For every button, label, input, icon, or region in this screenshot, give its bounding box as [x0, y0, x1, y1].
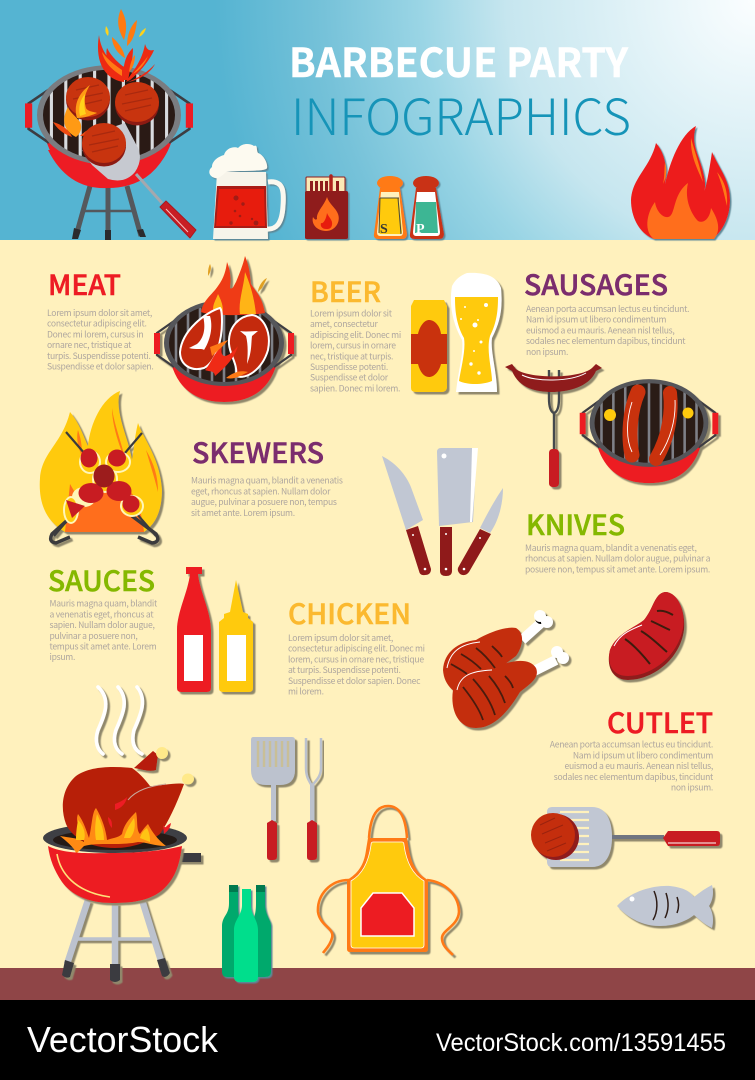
icon: flame with skewers [40, 391, 162, 543]
text: cutlet description: euismod a eu mauris. Aenean nisl tellus, [564, 760, 713, 772]
icon: sausage on fork [505, 364, 602, 487]
text: beer description: Suspendisse et dolor [310, 372, 389, 384]
heading: cutlet: CUTLET [607, 702, 713, 742]
title: INFOGRAPHICS [291, 78, 631, 150]
footer: VectorStock logo: VectorStock [27, 1019, 219, 1060]
text: sauces description: pulvinar a posuere non, [50, 630, 138, 642]
text: cutlet description [550, 739, 714, 794]
heading: sausages: SAUSAGES [524, 264, 668, 304]
icon: kettle grill with roast chicken [43, 745, 201, 982]
icon: salt and pepper shakers [374, 176, 444, 239]
icon: big grill with burgers [25, 9, 196, 240]
panel: skewers [40, 391, 343, 543]
icon: grill with sausages [580, 379, 718, 483]
icon: ketchup bottle [177, 567, 211, 692]
icon: matchbox [305, 176, 348, 239]
text: skewers description: eget, rhoncus at sapien. Nullam dolor [191, 485, 331, 497]
text: cutlet description: Nam id ipsum ut libero condimentum [573, 749, 713, 761]
heading: knives: KNIVES [526, 504, 625, 544]
heading: meat: MEAT [48, 264, 121, 304]
cream background [0, 240, 755, 968]
icon: green bottles [222, 885, 271, 982]
text: sauces description: Mauris magna quam, blandit [50, 598, 158, 610]
text: sauces description: ipsum. [50, 651, 75, 663]
icon: cleaver [437, 448, 478, 576]
title: BARBECUE PARTY [289, 31, 629, 89]
text: chicken description: at turpis. Suspendisse potenti. [288, 664, 401, 676]
text: skewers description [191, 475, 343, 519]
panel: meat [47, 256, 294, 402]
heading: chicken: CHICKEN [288, 593, 411, 633]
panel: chicken [288, 592, 684, 728]
flames over the burger [53, 85, 101, 137]
icon: salt and pepper shakers: S [380, 222, 388, 237]
text: skewers description: Mauris magna quam, blandit a venenatis [191, 475, 343, 487]
text: beer description: sapien. Donec mi lorem. [310, 382, 400, 394]
text: beer description: adipiscing elit. Donec mi [310, 329, 401, 341]
text: chicken description: lorem, cursus in ornare nec, tristique [288, 653, 424, 665]
icon: mustard bottle [219, 580, 253, 692]
footer: image id: VectorStock.com/13591455 [436, 1029, 726, 1057]
text: cutlet description: non ipsum. [671, 782, 713, 794]
panel: knives [382, 448, 711, 576]
flames above the grill [98, 9, 155, 82]
text: chicken description: mi lorem. [288, 686, 324, 698]
text: beer description [310, 308, 401, 394]
text: sauces description: tempus sit amet ante. Lorem [50, 640, 157, 652]
text: sausages description: Nam id ipsum ut libero condimentum [526, 314, 666, 326]
text: sauces description [50, 598, 158, 663]
text: knives description: rhoncus at sapien. Nullam dolor augue, pulvinar a [525, 553, 711, 565]
heading: beer: BEER [310, 271, 381, 311]
text: beer description: Suspendisse potenti. [310, 361, 388, 373]
panel: beer [310, 271, 502, 394]
icon: steam [96, 687, 142, 754]
icon: paring knife [458, 488, 503, 575]
text: knives description: posuere non, tempus sit amet ante. Lorem ipsum. [525, 563, 710, 575]
text: meat description: turpis. Suspendisse potenti. [47, 350, 151, 362]
text: beer description: amet, consectetur [310, 318, 379, 330]
panel: sausages [505, 264, 718, 487]
icon: beer mug [209, 144, 283, 239]
text: sausages description: non ipsum. [526, 346, 568, 358]
text: cutlet description: Aenean porta accumsan lectus eu tincidunt. [550, 739, 713, 751]
text: beer description: nec, tristique at turpis. [310, 350, 393, 362]
text: sauces description: sapien. Nullam dolor augue, [50, 619, 155, 631]
icon: fish [617, 885, 713, 928]
icon: steak [609, 592, 684, 680]
text: meat description: Lorem ipsum dolor sit amet, [47, 307, 152, 319]
text: sausages description: Aenean porta accumsan lectus eu tincidunt. [526, 303, 689, 315]
text: skewers description: augue, pulvinar a posuere non, tempus [191, 496, 337, 508]
panel: sauces [48, 560, 253, 692]
text: sausages description: euismod a eu mauris. Aenean nisl tellus, [526, 324, 675, 336]
text: knives description: Mauris magna quam, blandit a venenatis eget, [525, 542, 697, 554]
text: meat description: Suspendisse et dolor sapien. [47, 360, 154, 372]
text: sausages description [526, 303, 689, 358]
icon: spatula with patty [531, 807, 720, 867]
text: chicken description: Lorem ipsum dolor sit amet, [288, 632, 393, 644]
text: chicken description: consectetur adipiscing elit. Donec mi [288, 643, 425, 655]
icon: apron [318, 806, 459, 955]
title [289, 31, 631, 150]
icon: chicken legs [443, 610, 569, 728]
panel: cutlet [531, 702, 720, 928]
text: knives description [525, 542, 711, 575]
brown floor band [0, 968, 755, 1000]
icon: beer can [411, 300, 447, 392]
text: meat description [47, 307, 154, 372]
heading: skewers: SKEWERS [192, 432, 324, 472]
text: chicken description [288, 632, 425, 698]
icon: salt and pepper shakers: P [416, 222, 425, 237]
icon: beer glass [451, 273, 502, 392]
icon: big flame [631, 126, 730, 239]
black footer band [0, 1000, 755, 1080]
heading: sauces: SAUCES [48, 560, 155, 600]
icon: serving fork [306, 738, 321, 860]
text: sausages description: sodales nec elementum dapibus, tincidunt [526, 335, 686, 347]
header background [0, 0, 755, 240]
text: beer description: Lorem ipsum dolor sit [310, 308, 393, 320]
icon: chef knife [382, 456, 431, 575]
text: meat description: Donec mi lorem, cursus in [47, 328, 143, 340]
text: chicken description: Suspendisse et dolor sapien. Donec [288, 675, 421, 687]
text: meat description: consectetur adipiscing elit. [47, 318, 147, 330]
icon: slotted spatula [251, 737, 295, 860]
text: beer description: lorem, cursus in ornare [310, 340, 396, 352]
icon: grill with steaks and flames [154, 256, 294, 402]
text: skewers description: sit amet ante. Lorem ipsum. [191, 507, 295, 519]
text: meat description: ornare nec, tristique at [47, 339, 132, 351]
text: cutlet description: sodales nec elementum dapibus, tincidunt [554, 771, 714, 783]
text: sauces description: a venenatis eget, rhoncus at [50, 608, 154, 620]
